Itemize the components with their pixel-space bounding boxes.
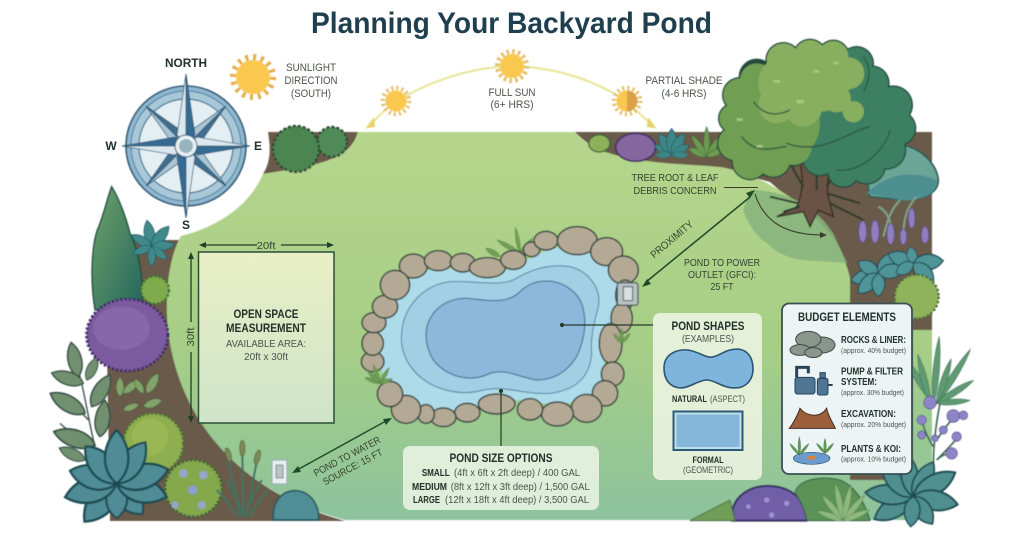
heading: budget elements: BUDGET ELEMENTS [798,310,896,324]
water faucet box [272,460,287,484]
open space text: 20ft x 30ft [244,352,288,363]
size: small: (4ft x 6ft x 2ft deep) / 400 GAL [454,468,580,479]
small brown bed leaves [116,371,163,413]
crown outline [717,39,916,188]
sun path arc [368,66,654,127]
label: tree root concern: TREE ROOT & LEAF [632,172,718,184]
open space text: MEASUREMENT [226,321,307,335]
budget item: plants and koi: PLANTS & KOI: [841,444,901,455]
lawn [167,132,932,520]
budget item: excavation: (approx. 20% budget) [841,422,906,429]
label: pond to power outlet: POND TO POWER [684,257,760,269]
open space text: OPEN SPACE [234,307,298,321]
heading: pond shapes: POND SHAPES [672,319,744,333]
trunk and roots [770,157,863,227]
label: pond to power outlet: 25 FT [710,281,734,293]
lavender and grass [859,197,929,245]
label: sunlight direction: DIRECTION [284,75,338,87]
compass rose [122,74,250,218]
purple flower stalks [917,396,968,467]
proximity double arrow [642,190,755,287]
sun: sunlight direction [233,57,273,97]
natural label: (ASPECT) [710,394,745,405]
lime bush [123,413,183,473]
label: partial shade: PARTIAL SHADE [646,75,722,87]
crown lobes [742,57,890,170]
sun: full sun [498,52,526,80]
garden bed soil [105,132,932,521]
label: north: NORTH [165,56,207,70]
formal label [683,455,733,476]
label: sunlight direction: (SOUTH) [291,88,331,100]
water deep [426,281,585,380]
label: east: E [254,139,262,153]
top right shrubs [589,127,726,161]
teal round bush [273,491,319,520]
cattails and grass [217,440,268,517]
size: medium: (8ft x 12ft x 3ft deep) / 1,500 GAL [451,482,590,493]
label: full sun [488,87,536,111]
teal back bush [867,145,938,201]
label: pond to power outlet [684,257,760,293]
rock ring [361,227,638,427]
water shallow [379,247,620,412]
crown highlights [737,62,839,148]
formal label: (GEOMETRIC) [683,465,733,476]
budget item: pump and filter [841,366,904,397]
sun: partial shade [614,88,640,114]
budget item: rocks and liner: ROCKS & LINER: [841,335,906,346]
formal pond shape [672,410,744,451]
label: partial shade: (4-6 HRS) [662,88,706,100]
green bush right [895,275,939,319]
icon: pump and filter [795,367,833,395]
hosta leaves [849,246,944,298]
label: proximity: PROXIMITY [648,218,696,261]
size: large: (12ft x 18ft x 4ft deep) / 3,500 GAL [445,495,589,506]
green bottom shrub [795,478,870,521]
pond top grass tuft [484,227,534,259]
label: partial shade [646,75,722,100]
label: full sun: (6+ HRS) [490,99,534,111]
label: pond to water source: POND TO WATER [312,435,383,479]
leafy stems [46,341,116,465]
budget item: rocks and liner: (approx. 40% budget) [841,348,906,355]
spiky bottom plant [816,483,871,523]
teal fern [129,220,175,267]
natural pond shape [664,349,753,388]
width dimension arrow [199,242,334,248]
water middle [401,266,599,394]
height dimension arrow [188,252,194,423]
label: tree root concern: DEBRIS CONCERN [634,185,716,197]
icon: plants and koi [789,437,835,464]
budget item: plants and koi: (approx. 10% budget) [841,456,906,464]
label: pond to water source: SOURCE: 15 FT [321,447,385,488]
cypress tree [92,187,142,310]
lower right plants [690,337,975,529]
size: large: LARGE [413,495,440,506]
open space text: AVAILABLE AREA: [226,339,306,350]
open space text [226,307,307,363]
small green bush [141,276,169,304]
foliage [717,39,916,188]
purple bush [87,299,168,371]
budget item: pump and filter: SYSTEM: [841,377,877,388]
subheading: examples: (EXAMPLES) [682,334,734,345]
spiky plant [901,337,975,406]
left grass tuft [690,500,735,521]
crown light foliage [758,40,864,127]
tree debris leader and curved arrow [724,188,827,238]
label: width 20ft: 20ft [256,240,276,252]
pond [361,227,638,427]
pond depth leader line [500,324,653,446]
purple shrub [616,133,656,161]
flowering bush [165,460,222,517]
icon: excavation [789,408,835,428]
icon: rocks [790,331,835,358]
budget item: pump and filter: (approx. 30% budget) [841,390,904,397]
formal label: FORMAL [692,455,724,466]
crown mid foliage [718,63,820,179]
label: south: S [182,218,190,232]
shade tree [717,39,944,319]
power outlet [617,283,638,305]
large agave [62,430,171,530]
sun: morning [383,88,409,114]
panel: pond size options [403,446,599,510]
crown dark foliage [787,47,915,187]
label: pond to power outlet: OUTLET (GFCI): [688,269,756,281]
tree shade on lawn [743,190,847,263]
heading: pond size options: POND SIZE OPTIONS [450,451,552,465]
open space measurement box [198,252,334,423]
size: small: SMALL [422,468,450,479]
water source arrow [292,418,392,473]
label: sunlight direction [284,62,338,100]
left plant border [46,187,319,530]
small lime shrub [589,135,610,152]
teal fern shrub [652,128,691,158]
label: height 30ft: 30ft [185,327,197,346]
size: medium: MEDIUM [412,482,447,493]
budget item: excavation: EXCAVATION: [841,409,896,420]
label: tree root concern [632,172,718,197]
panel: budget elements [782,304,912,474]
budget item: excavation [841,409,906,429]
large agave right [864,451,960,529]
pond side grass tufts [364,328,631,385]
right side soil strip [850,262,932,480]
green spiky shrub [687,127,726,160]
budget item: plants and koi [841,444,906,464]
budget item: pump and filter: PUMP & FILTER [841,366,904,378]
label: full sun: FULL SUN [488,87,536,99]
panel: pond shapes [653,313,762,480]
title: Planning Your Backyard Pond [311,7,712,40]
label: sunlight direction: SUNLIGHT [286,62,336,74]
label: west: W [105,139,117,153]
top left shrubs [273,126,347,172]
purple bottom bush [732,486,807,521]
natural label [672,394,745,405]
natural label: NATURAL [672,394,707,405]
budget item: rocks and liner [841,335,906,355]
